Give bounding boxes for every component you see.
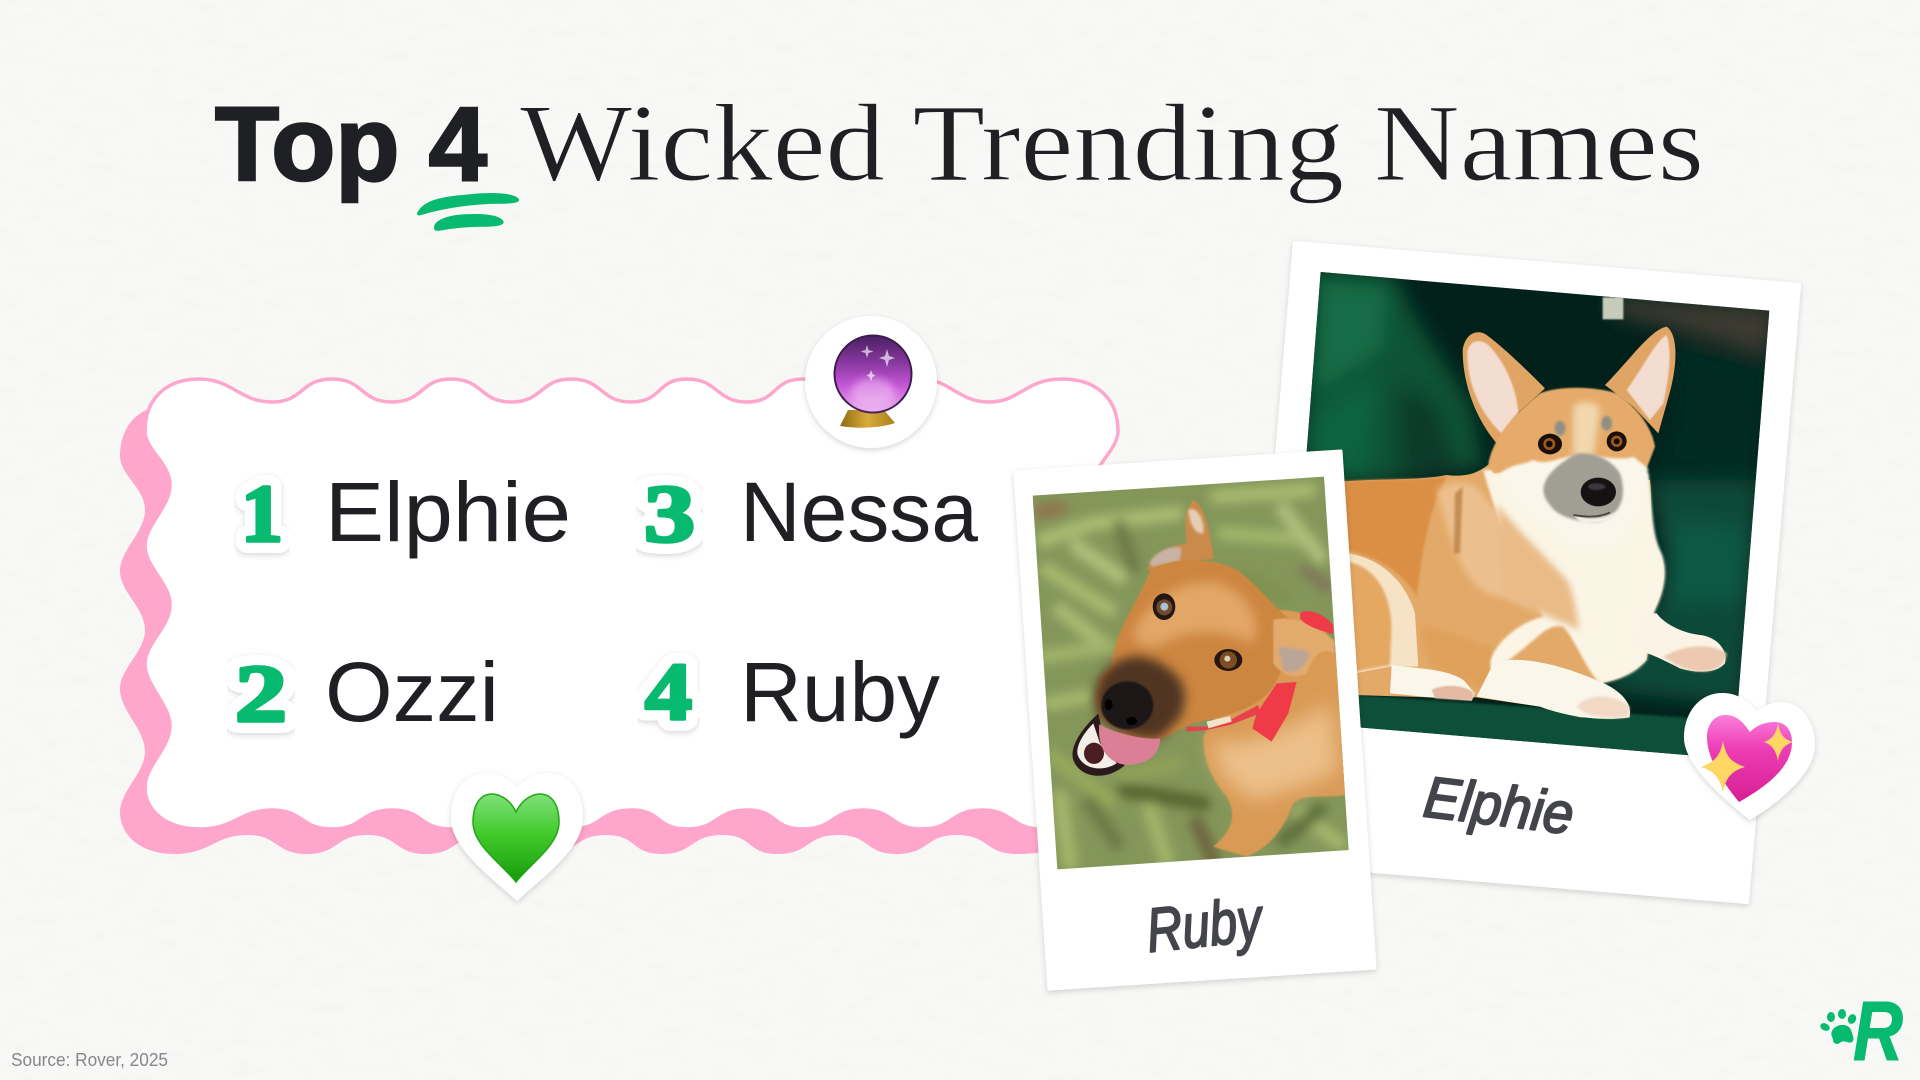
icon: crystal ball sticker bbox=[805, 316, 937, 448]
panel: Elphie polaroid bbox=[1243, 243, 1800, 902]
badge 4 numeral: 4 bbox=[645, 646, 692, 737]
right ear bbox=[1273, 618, 1335, 676]
badge 2: 2 bbox=[235, 648, 287, 739]
polaroid frame bbox=[1243, 243, 1799, 902]
head bbox=[1096, 561, 1291, 740]
paw bbox=[1819, 1009, 1858, 1044]
mouth and tongue bbox=[1073, 713, 1125, 776]
title bbox=[215, 82, 1704, 204]
name list bbox=[235, 465, 978, 739]
card white face bbox=[145, 379, 1118, 829]
polaroid frame bbox=[1015, 451, 1375, 989]
badge 1 numeral: 1 bbox=[241, 468, 283, 559]
ears bbox=[1147, 500, 1214, 570]
icon: green heart sticker bbox=[451, 773, 583, 901]
collar and bow bbox=[1187, 705, 1260, 732]
title: serif part: Wicked Trending Names bbox=[520, 82, 1704, 204]
source note: Source: Rover, 2025 bbox=[11, 1050, 168, 1070]
grey muzzle bbox=[1543, 453, 1623, 522]
panel: Ruby polaroid bbox=[1015, 451, 1375, 989]
eyes bbox=[1153, 593, 1175, 620]
logo: Rover paw and R bbox=[1819, 984, 1903, 1078]
icon: pink sparkling heart sticker bbox=[1684, 693, 1815, 820]
title: bold part: Top 4 bbox=[215, 86, 487, 203]
card pink shadow bbox=[120, 404, 1093, 854]
badge 3: 3 bbox=[644, 468, 695, 559]
head bbox=[1488, 388, 1655, 473]
handwritten caption: Elphie: Elphie bbox=[1420, 764, 1577, 847]
name 3: Nessa bbox=[740, 465, 978, 559]
name 2: Ozzi bbox=[325, 645, 499, 739]
white chest bbox=[1483, 470, 1665, 684]
body bbox=[1342, 460, 1664, 717]
badge 1: 1 bbox=[241, 468, 283, 559]
photo: tan dog on grass bbox=[1023, 470, 1357, 870]
name 4: Ruby bbox=[740, 645, 940, 739]
green underline scribble bbox=[418, 194, 518, 230]
handwritten caption: Ruby: Ruby bbox=[1143, 885, 1268, 966]
photo: corgi on green sofa bbox=[1306, 272, 1770, 756]
name 1: Elphie bbox=[325, 465, 571, 559]
letter R: R bbox=[1853, 984, 1903, 1078]
front legs and paws bbox=[1477, 660, 1630, 719]
panel: wavy name card bbox=[120, 379, 1118, 854]
badge 4: 4 bbox=[645, 646, 692, 737]
snout bbox=[1095, 656, 1185, 739]
eyes and nose bbox=[1538, 434, 1562, 454]
badge 2 numeral: 2 bbox=[235, 648, 287, 739]
body bbox=[1203, 610, 1347, 857]
ears bbox=[1463, 332, 1545, 447]
badge 3 numeral: 3 bbox=[644, 468, 695, 559]
